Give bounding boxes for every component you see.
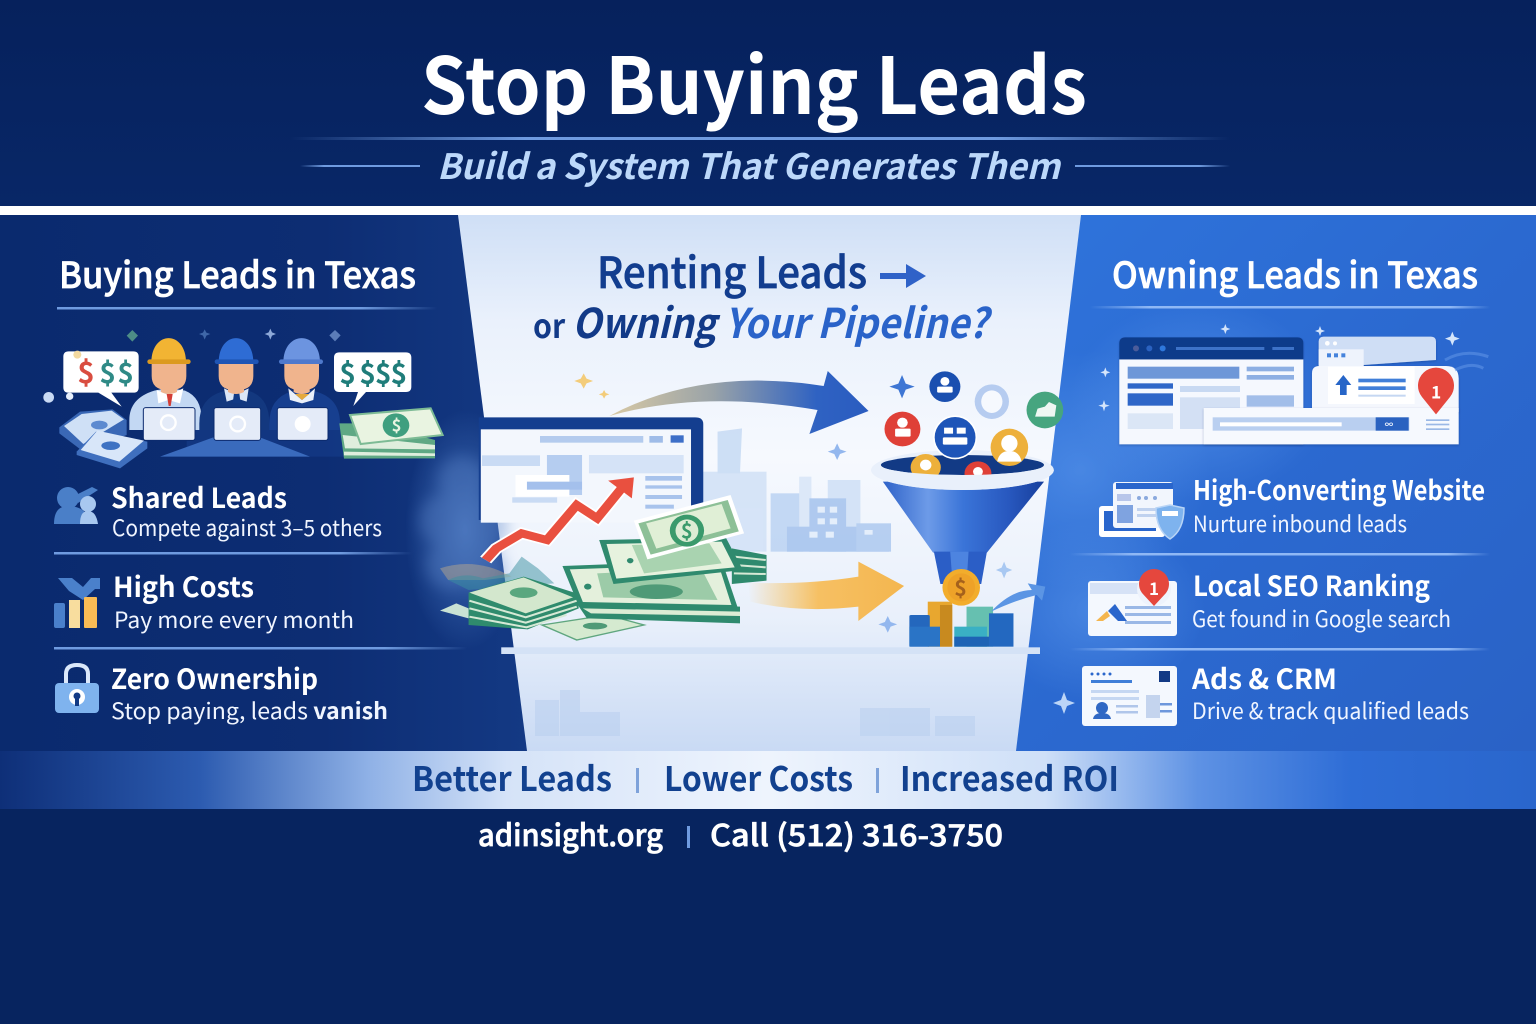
speech bubble: high price [334, 352, 411, 406]
green cash stack: $ [392, 412, 401, 436]
item: high-converting website: Nurture inbound leads [1193, 507, 1407, 539]
item: local SEO ranking: Get found in Google search [1192, 602, 1451, 634]
left cloud overlap [419, 456, 508, 592]
top bill [634, 495, 744, 559]
arrow: renting to owning [609, 371, 869, 434]
speech bubble: high price: $ [391, 352, 407, 392]
panel: owning leads background [1000, 215, 1536, 751]
panel heading: buying leads: Buying Leads in Texas [59, 247, 416, 299]
item: high costs [54, 566, 354, 635]
panel: buying leads background [0, 215, 540, 751]
speech bubble: high price: $ [359, 352, 376, 392]
floor band [501, 647, 1040, 654]
bottom stack [577, 603, 740, 623]
desk [160, 423, 347, 457]
icon: site with shield [1099, 482, 1184, 539]
sparkle [1053, 692, 1075, 714]
funnel rim front [871, 465, 1054, 490]
wifi ghost icon [1445, 353, 1488, 370]
worker 1 [129, 338, 202, 430]
arrow: heading [880, 264, 926, 288]
blue cash pile [59, 409, 147, 468]
contact footer: adinsight.org [478, 811, 663, 855]
green cash stack [339, 408, 443, 459]
map pin [1418, 368, 1454, 414]
illustration: renting to owning [440, 371, 1063, 654]
icon: bars and check [54, 578, 100, 628]
subtitle: Build a System That Generates Them [437, 139, 1062, 190]
centre heading: Renting Leads [597, 239, 867, 301]
item: local SEO ranking [1088, 565, 1451, 636]
funnel [871, 450, 1054, 584]
cash piles: $ [681, 515, 693, 544]
benefits strip: Increased ROI [900, 752, 1119, 801]
sparkles [1098, 324, 1460, 411]
benefits strip: Lower Costs [664, 752, 853, 801]
centre heading [533, 239, 993, 350]
item: high costs: High Costs [113, 566, 254, 606]
growth bars and coin [909, 569, 1045, 647]
item: ads and CRM: Drive & track qualified leads [1192, 694, 1469, 726]
icon: lock [55, 665, 99, 713]
item: high-converting website: High-Converting Website [1193, 469, 1485, 508]
contact footer [478, 811, 1003, 855]
worker 3 [269, 338, 340, 430]
speech bubble: high price: $ [339, 352, 356, 392]
cash piles [440, 495, 767, 640]
benefits strip: Better Leads [412, 752, 612, 801]
arrow: rising costs [486, 477, 634, 560]
item: shared leads [54, 477, 382, 543]
title: Stop Buying Leads [421, 25, 1087, 137]
item: local SEO ranking: Local SEO Ranking [1193, 565, 1430, 605]
back browser window [1119, 337, 1303, 444]
centre heading: or Owning Your Pipeline? [533, 290, 993, 350]
speech bubble: low price [43, 350, 139, 407]
icon: ranked listing [1088, 569, 1177, 636]
item: shared leads: Shared Leads [111, 477, 287, 517]
laptops [143, 408, 328, 440]
icon: CRM card [1082, 666, 1177, 726]
side browser window [1312, 337, 1459, 412]
faded skyline at centre bottom [535, 690, 975, 736]
sparkles [127, 329, 341, 342]
illustration: crowded lead buyers [43, 329, 443, 468]
contact footer: Call (512) 316-3750 [710, 811, 1003, 855]
lead tokens [884, 371, 1063, 485]
speech bubble: low price: $ [117, 352, 134, 392]
item: high costs: Pay more every month [114, 603, 354, 635]
growth bars and coin: $ [954, 571, 967, 602]
large bill [562, 560, 738, 608]
item: ads and CRM [1053, 658, 1469, 726]
illustration: owned website and search listing [1098, 324, 1488, 444]
panel: centre comparison background [458, 215, 1081, 751]
middle bill [599, 537, 743, 584]
item: zero ownership: Zero Ownership [111, 658, 318, 698]
left stack [469, 577, 579, 629]
decorative glows [405, 300, 1330, 700]
sparkles [574, 373, 609, 399]
search bar card [1204, 408, 1459, 444]
back stack [732, 548, 767, 584]
monitor [479, 417, 703, 523]
search bar card: ∞ [1385, 418, 1394, 430]
cityscape [701, 428, 891, 552]
benefits strip [0, 751, 1536, 809]
header [0, 0, 1536, 206]
icon: ranked listing: 1 [1149, 575, 1159, 600]
speech bubble: low price: $ [99, 352, 116, 392]
map pin: 1 [1431, 379, 1441, 404]
item: zero ownership [55, 658, 388, 726]
item: ads and CRM: Ads & CRM [1191, 658, 1337, 698]
item: zero ownership: Stop paying, leads vanish [111, 694, 388, 726]
arrow: returns [748, 562, 904, 621]
item: shared leads: Compete against 3–5 others [112, 511, 382, 543]
speech bubble: high price: $ [375, 352, 392, 392]
worker 2 [199, 338, 269, 430]
icon: people [54, 487, 98, 524]
item: high-converting website [1099, 469, 1485, 539]
white divider band [0, 206, 1536, 215]
speech bubble: low price: $ [77, 350, 95, 392]
panel heading: owning leads: Owning Leads in Texas [1112, 247, 1478, 299]
sparkles [828, 375, 1012, 633]
